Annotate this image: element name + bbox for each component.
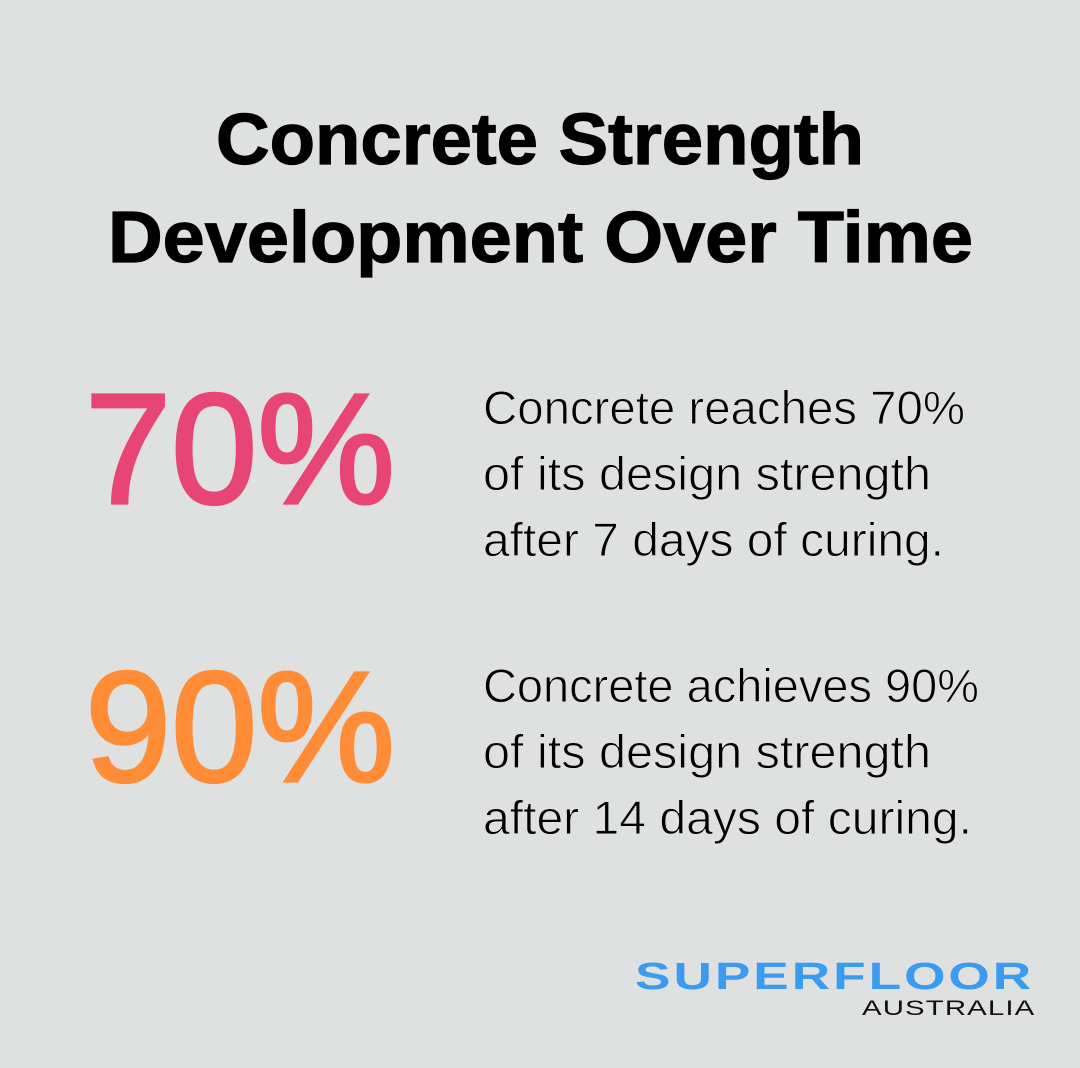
title: Development Over Time xyxy=(108,198,973,278)
text block: 90% description: after 14 days of curing. xyxy=(483,791,972,844)
stat: 70%: 70% xyxy=(85,362,395,537)
text block: 90% description: Concrete achieves 90% xyxy=(483,659,979,712)
text block: 70% description: Concrete reaches 70% xyxy=(483,381,965,434)
logo: Superfloor Australia: AUSTRALIA xyxy=(862,997,1034,1020)
stat: 90%: 90% xyxy=(85,640,395,815)
text block: 90% description: of its design strength xyxy=(483,725,931,778)
text block: 70% description xyxy=(483,381,965,566)
text block: 70% description: after 7 days of curing. xyxy=(483,513,944,566)
text block: 70% description: of its design strength xyxy=(483,447,931,500)
logo: Superfloor Australia: SUPERFLOOR xyxy=(635,954,1031,997)
title xyxy=(108,100,973,278)
title: Concrete Strength xyxy=(216,100,864,180)
logo: Superfloor Australia xyxy=(635,954,1034,1020)
text block: 90% description xyxy=(483,659,979,844)
